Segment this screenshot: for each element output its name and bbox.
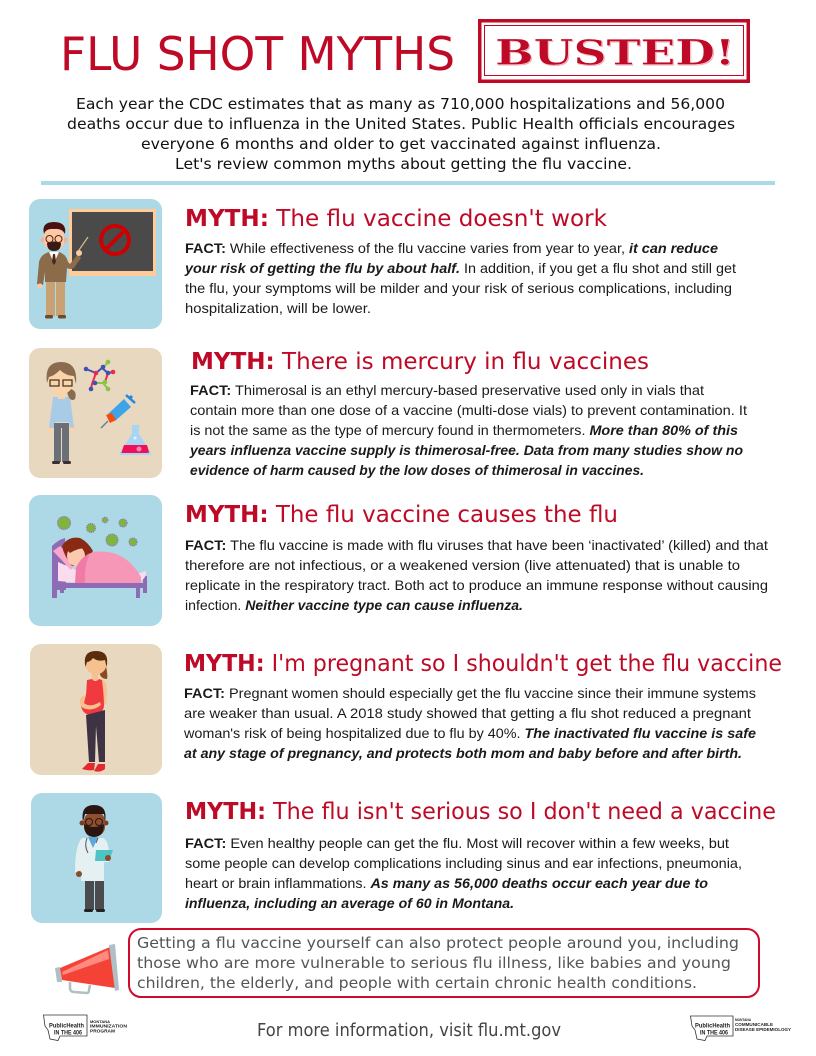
myth 2 fact: contain more than one dose of a vaccine (multi-dose vials) to prevent contamination. It xyxy=(190,402,747,418)
myth 5 fact xyxy=(185,835,742,911)
logo: immunization program xyxy=(44,1015,127,1040)
myth 1 fact: FACT: While effectiveness of the flu vaccine varies from year to year, it can reduce xyxy=(185,240,718,256)
myth 1 fact xyxy=(184,240,736,316)
myth 3 heading: MYTH: The flu vaccine causes the flu xyxy=(185,502,618,528)
illustration: teacher at blackboard xyxy=(29,199,162,329)
intro text: deaths occur due to influenza in the United States. Public Health officials encourages xyxy=(67,115,735,133)
myth 3 fact: infection. Neither vaccine type can cause influenza. xyxy=(185,597,523,613)
callout: those who are more vulnerable to serious flu illness, like babies and young xyxy=(137,954,731,972)
busted stamp xyxy=(480,21,748,81)
logo: communicable disease epidemiology: COMMUNICABLE xyxy=(735,1022,773,1027)
callout: Getting a flu vaccine yourself can also protect people around you, including xyxy=(137,934,739,952)
panel: myth 4 xyxy=(30,644,782,775)
myth 1 fact: the flu, your symptoms will be milder and your risk of serious complications, including xyxy=(185,280,732,296)
panel: myth 2 xyxy=(29,348,747,478)
myth 5 fact: heart or brain inflammations. As many as 56,000 deaths occur each year due to xyxy=(185,875,708,891)
myth 4 fact xyxy=(183,685,756,761)
myth 3 fact: therefore are not infectious, or a weakened version (live attenuated) that is unable to xyxy=(185,557,740,573)
logo: immunization program: MONTANA xyxy=(90,1019,110,1024)
illustration: pregnant woman xyxy=(30,644,162,775)
myth 4 heading: MYTH: I'm pregnant so I shouldn't get the flu vaccine xyxy=(184,651,782,677)
myth 2 fact: is not the same as the type of mercury found in thermometers. More than 80% of this xyxy=(190,422,738,438)
panel: myth 3 xyxy=(29,495,768,626)
illustration: sick person in bed with viruses xyxy=(29,495,162,626)
logo: communicable disease epidemiology: IN THE 406 xyxy=(700,1030,729,1036)
callout: children, the elderly, and people with certain chronic health conditions. xyxy=(137,974,697,992)
panel: myth 5 xyxy=(31,793,776,923)
illustration: doctor xyxy=(31,793,162,923)
panel: myth 1 xyxy=(29,199,736,329)
logo: communicable disease epidemiology: PublicHealth xyxy=(695,1024,730,1030)
myth 1 fact: hospitalization, will be lower. xyxy=(185,300,371,316)
divider xyxy=(41,181,775,185)
busted stamp: BUSTED! xyxy=(495,32,735,74)
intro text: Each year the CDC estimates that as many as 710,000 hospitalizations and 56,000 xyxy=(76,95,725,113)
logo: immunization program: PublicHealth xyxy=(49,1024,84,1030)
myth 4 fact: are weaker than usual. A 2018 study showed that getting a flu shot reduced a pregnant xyxy=(184,705,751,721)
myth 2 fact: FACT: Thimerosal is an ethyl mercury-based preservative used only in vials that xyxy=(190,382,704,398)
intro text: everyone 6 months and older to get vaccinated against influenza. xyxy=(141,135,661,153)
logo: communicable disease epidemiology xyxy=(690,1016,791,1040)
intro text xyxy=(67,95,735,173)
intro text: Let's review common myths about getting the flu vaccine. xyxy=(175,155,632,173)
footer text: For more information, visit flu.mt.gov xyxy=(257,1020,561,1041)
myth 3 fact: FACT: The flu vaccine is made with flu viruses that have been ‘inactivated’ (killed) and that xyxy=(185,537,768,553)
myth 4 fact: woman's risk of being hospitalized due to flu by 40%. The inactivated flu vaccine is safe xyxy=(183,725,756,741)
myth 5 fact: some people can develop complications including sinus and ear infections, pneumonia, xyxy=(185,855,742,871)
myth 4 fact: at any stage of pregnancy, and protects both mom and baby before and after birth. xyxy=(184,745,742,761)
myth 3 fact xyxy=(185,537,768,613)
myth 2 fact: years influenza vaccine supply is thimerosal-free. Data from many studies show no xyxy=(189,442,743,458)
busted stamp: BUSTED! xyxy=(496,34,736,74)
myth 4 fact: FACT: Pregnant women should especially get the flu vaccine since their immune systems xyxy=(184,685,756,701)
logo: communicable disease epidemiology: DISEASE EPIDEMIOLOGY xyxy=(735,1027,791,1032)
logo: communicable disease epidemiology: MONTANA xyxy=(735,1017,751,1022)
myth 5 heading: MYTH: The flu isn't serious so I don't need a vaccine xyxy=(185,799,776,825)
callout xyxy=(129,929,759,997)
myth 5 fact: influenza, including an average of 60 in Montana. xyxy=(185,895,514,911)
myth 1 heading: MYTH: The flu vaccine doesn't work xyxy=(185,206,608,232)
myth 2 fact: evidence of harm caused by the low doses of thimerosal in vaccines. xyxy=(190,462,644,478)
illustration: scientist with molecule, syringe and flask xyxy=(29,348,162,478)
logo: immunization program: IMMUNIZATION xyxy=(90,1024,127,1028)
myth 5 fact: FACT: Even healthy people can get the flu. Most will recover within a few weeks, but xyxy=(185,835,729,851)
title: FLU SHOT MYTHS xyxy=(60,27,455,81)
myth 3 fact: replicate in the respiratory tract. Both act to produce an immune response without causing xyxy=(185,577,768,593)
myth 2 fact xyxy=(189,382,747,478)
logo: immunization program: PROGRAM xyxy=(90,1028,115,1034)
myth 1 fact: your risk of getting the flu by about half. In addition, if you get a flu shot and still get xyxy=(184,260,736,276)
icon: megaphone xyxy=(55,944,119,993)
myth 2 heading: MYTH: There is mercury in flu vaccines xyxy=(191,349,649,375)
logo: immunization program: IN THE 406 xyxy=(54,1030,83,1036)
